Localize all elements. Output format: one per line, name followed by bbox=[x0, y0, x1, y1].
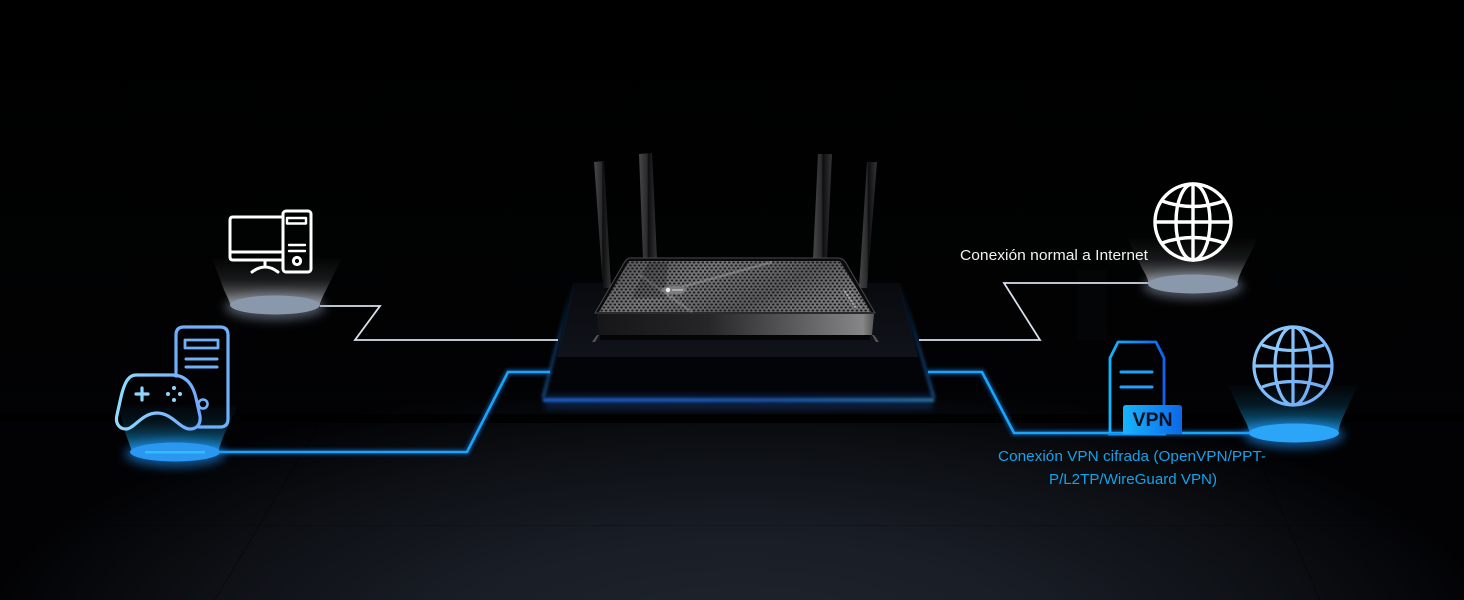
icon: game tower and controller bbox=[116, 327, 228, 429]
router logo bbox=[661, 286, 687, 294]
icon: blue globe bbox=[1254, 327, 1332, 405]
icon: VPN server bbox=[1108, 342, 1182, 436]
router bbox=[592, 153, 879, 342]
Internet pedestal bbox=[1127, 238, 1258, 299]
white line: PC to router bbox=[320, 306, 558, 340]
antenna 3 bbox=[813, 154, 832, 259]
antenna 1 bbox=[594, 161, 611, 288]
label: normal Internet connection: Conexión normal a Internet bbox=[960, 247, 1149, 264]
label: encrypted VPN connection bbox=[998, 449, 1266, 488]
label: encrypted VPN connection: P/L2TP/WireGuard VPN) bbox=[1049, 472, 1217, 488]
icon: desktop computer bbox=[230, 211, 311, 272]
gaming pedestal bbox=[118, 405, 238, 467]
blue line: gaming device to router bbox=[145, 372, 550, 452]
blue line: router to VPN Internet bbox=[928, 372, 1255, 433]
icon: white globe bbox=[1155, 184, 1231, 260]
white line: router to Internet bbox=[919, 283, 1150, 340]
router feet bbox=[592, 335, 879, 342]
router front panel bbox=[597, 314, 874, 335]
status LEDs bbox=[844, 291, 861, 308]
floor bbox=[0, 270, 1464, 600]
platform under router bbox=[543, 283, 934, 410]
label: encrypted VPN connection: Conexión VPN cifrada (OpenVPN/PPT- bbox=[998, 449, 1266, 465]
antenna 4 bbox=[859, 162, 877, 288]
VPN Internet pedestal bbox=[1228, 385, 1358, 448]
router lid bbox=[595, 258, 875, 313]
VPN badge: VPN bbox=[1132, 409, 1173, 431]
antenna 2 bbox=[639, 153, 657, 259]
PC pedestal bbox=[212, 258, 342, 320]
